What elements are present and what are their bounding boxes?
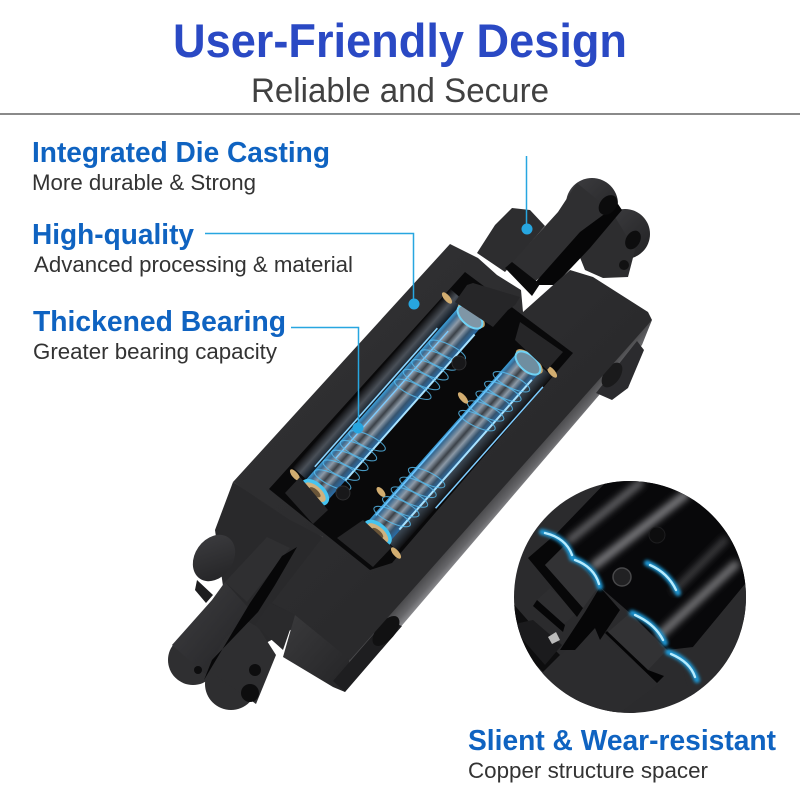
lower hinge: [168, 482, 323, 710]
subtitle: Reliable and Secure: [251, 72, 549, 110]
inset pivots: [613, 527, 665, 586]
inset left hinge: [510, 587, 620, 672]
inset blocks: [528, 533, 667, 683]
upper hinge: [477, 178, 650, 296]
rear side plate: [596, 341, 644, 400]
product: concealed hinge: [168, 178, 652, 710]
label: thickened bearing: Greater bearing capacity: [33, 339, 277, 364]
label: high-quality: [32, 219, 353, 277]
cross blocks: [285, 283, 563, 567]
right bearing: [357, 342, 554, 557]
inset lower face: [542, 672, 620, 712]
label: silent and wear-resistant: [468, 725, 776, 783]
body side wall: [320, 320, 652, 692]
front face of body: [233, 244, 652, 660]
label: integrated die casting: Integrated Die Casting: [32, 137, 330, 169]
label: silent and wear-resistant: Copper structure spacer: [468, 758, 708, 783]
lower end face: [283, 615, 350, 692]
label: high-quality: Advanced processing & material: [34, 252, 353, 277]
left bearing: [285, 288, 495, 515]
inset circle: copper spacer detail: [510, 478, 750, 720]
label: thickened bearing: [33, 306, 286, 364]
label: high-quality: High-quality: [32, 219, 194, 251]
side mounting hole upper: [597, 359, 627, 391]
recess with bearings: [269, 272, 573, 570]
label: integrated die casting: More durable & Strong: [32, 170, 256, 195]
callout line: high-quality: [205, 234, 420, 310]
callout line: thickened bearing: [291, 328, 364, 434]
lower side plate: [333, 620, 402, 692]
screw dots: [336, 356, 466, 500]
label: thickened bearing: Thickened Bearing: [33, 306, 286, 338]
label: silent and wear-resistant: Slient & Wear-resistant: [468, 725, 776, 757]
callout line: die casting: [522, 156, 532, 234]
side mounting hole lower: [368, 611, 404, 651]
title: User-Friendly Design: [173, 14, 627, 67]
inset rods: [557, 481, 746, 696]
label: integrated die casting: [32, 137, 330, 195]
brass pins: [288, 291, 559, 560]
inset blue arcs: [542, 532, 697, 680]
